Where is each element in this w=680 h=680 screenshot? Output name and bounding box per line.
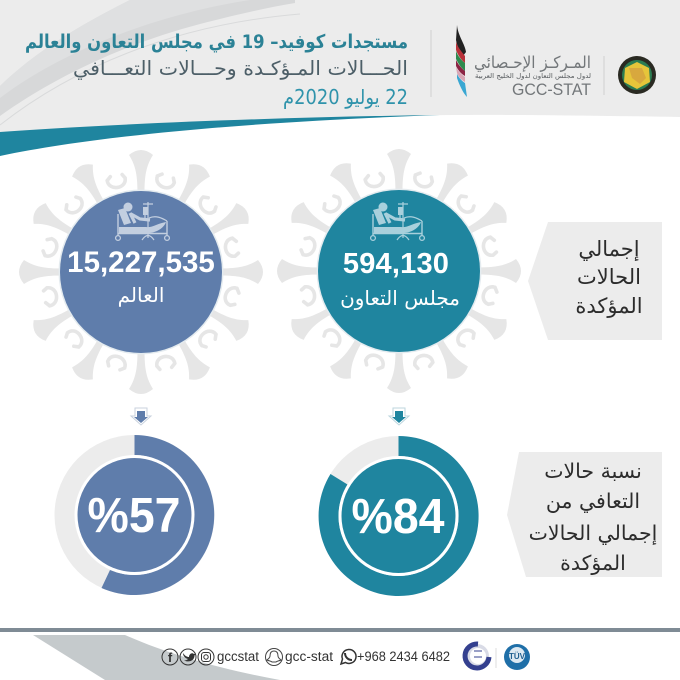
header divider (431, 30, 604, 97)
logo: GCC-STAT wordmark (474, 53, 591, 99)
arc: 84 percent (319, 436, 479, 596)
title: الحـــالات المـؤكـدة وحـــالات التعـــافي (73, 57, 408, 80)
arrow: world (131, 408, 151, 425)
logo: GCC-STAT wordmark: المـركـز الإحـصائي (474, 53, 591, 73)
label panel: recovery rate (507, 452, 662, 577)
contact: phone: +968 2434 6482 (357, 649, 450, 664)
logo: GCC-STAT wordmark: لدول مجلس التعاون لدول الخليج العربية (475, 72, 591, 80)
label panel: recovery rate: نسبة حالات (544, 459, 642, 483)
icon: hospital patient (116, 202, 169, 240)
icon: snapchat (266, 648, 282, 666)
title (25, 31, 408, 109)
label panel: total confirmed cases: إجمالي (578, 237, 640, 262)
logo: TUV certification (504, 644, 530, 670)
donut: GCC 84% (318, 436, 479, 596)
virus graphic: GCC (277, 149, 521, 393)
label panel: total confirmed cases: الحالات (577, 265, 641, 289)
donut: world 57% (54, 435, 214, 595)
number: world cases: 15,227,535 (67, 246, 215, 279)
value: 84%: %84 (352, 490, 444, 544)
panel: GCC total confirmed cases (277, 149, 521, 393)
label: GCC: مجلس التعاون (340, 286, 460, 310)
contact: gccstat: gccstat (217, 649, 259, 664)
arc: 57 percent (102, 435, 214, 595)
number: GCC cases: 594,130 (343, 248, 449, 280)
label panel: total confirmed cases: المؤكدة (575, 294, 643, 318)
contact: gcc-stat: gcc-stat (285, 649, 333, 664)
label: world: العالم (118, 283, 164, 307)
label panel: recovery rate: إجمالي الحالات (529, 521, 657, 546)
footer swoosh (33, 635, 280, 680)
teal swoosh (0, 115, 440, 156)
title: 22 يوليو 2020م (283, 85, 408, 109)
label panel: recovery rate: التعافي من (546, 489, 640, 513)
label panel: total confirmed cases (528, 222, 662, 340)
logo: ISO certification (465, 644, 489, 668)
social icons: facebook, twitter, instagram: f (168, 650, 173, 665)
logo: GCC-STAT wordmark: GCC-STAT (512, 80, 591, 99)
social icons: facebook, twitter, instagram (162, 649, 214, 665)
title: مستجدات كوفيد– 19 في مجلس التعاون والعالم (25, 31, 408, 53)
logo: TUV certification: TÜV (509, 652, 526, 661)
arrow: GCC (389, 408, 409, 425)
value: 57%: %57 (88, 489, 180, 543)
panel: world total confirmed cases (19, 150, 263, 394)
header background (0, 0, 680, 136)
icon: hospital patient (371, 202, 424, 240)
label panel: recovery rate: المؤكدة (560, 551, 626, 575)
icon: whatsapp (341, 649, 356, 664)
circle: world (60, 191, 222, 353)
logo: GCC-STAT ribbon (456, 25, 467, 97)
logo: GCC emblem (618, 56, 656, 94)
footer bar (0, 628, 680, 632)
virus graphic: world (19, 150, 263, 394)
circle: GCC (318, 190, 480, 352)
